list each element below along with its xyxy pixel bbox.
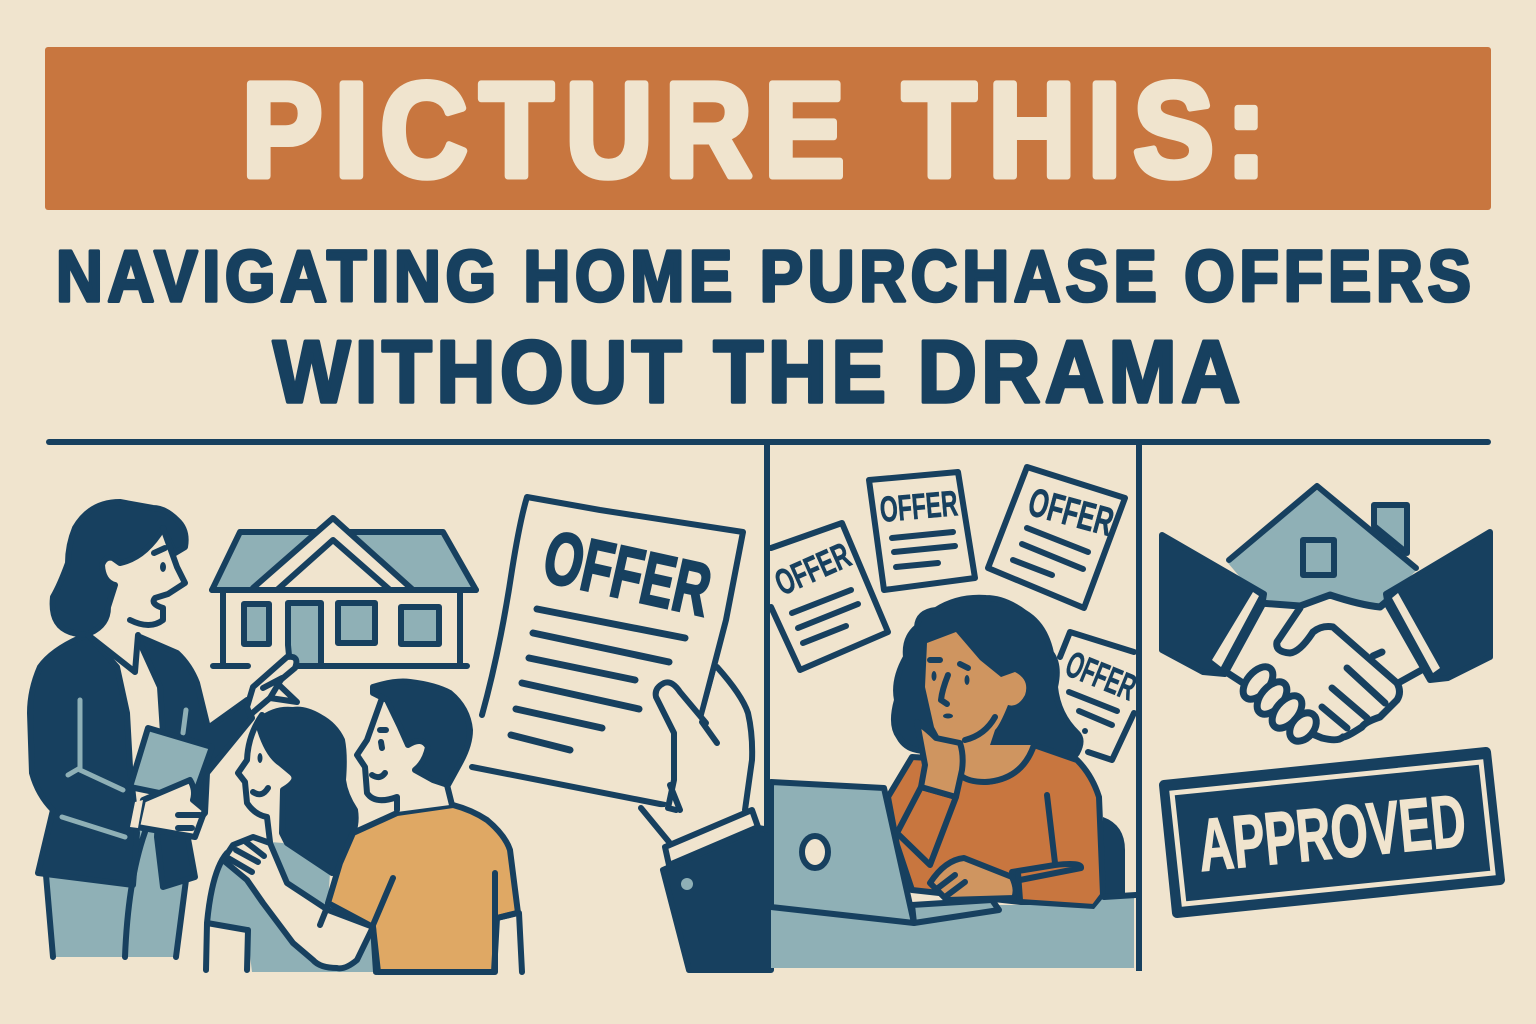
panel: overwhelmed buyer bbox=[769, 467, 1142, 968]
icon: offer document in hand bbox=[472, 497, 771, 970]
subtitle heading: NAVIGATING HOME PURCHASE OFFERS bbox=[56, 236, 1471, 317]
figure: couple bbox=[206, 682, 522, 972]
subtitle heading bbox=[56, 236, 1471, 422]
figure: woman at laptop bbox=[888, 598, 1125, 907]
sheet 3 bbox=[988, 467, 1125, 608]
icon: house bbox=[212, 518, 476, 666]
sheet 4: OFFER bbox=[1060, 643, 1142, 708]
woman bbox=[206, 710, 373, 972]
desk bbox=[771, 894, 1134, 968]
sheet 2 bbox=[869, 472, 975, 590]
sheet 2: OFFER bbox=[878, 482, 959, 530]
icon: clipboard bbox=[130, 728, 212, 800]
stamp: approved bbox=[1164, 752, 1500, 913]
hand on chin bbox=[917, 722, 963, 797]
title: Picture This: PICTURE THIS: bbox=[242, 56, 1266, 205]
sheet 4 bbox=[1060, 632, 1142, 760]
sheet 3: OFFER bbox=[1024, 480, 1118, 545]
header divider bbox=[46, 439, 1491, 445]
sheet 1: OFFER bbox=[769, 534, 857, 603]
icon: laptop bbox=[771, 782, 999, 923]
icon: floating offer sheets bbox=[769, 467, 1142, 760]
title banner bbox=[45, 47, 1491, 210]
hand on keyboard bbox=[1012, 864, 1081, 880]
man bbox=[223, 682, 522, 972]
chair bbox=[1100, 817, 1125, 897]
panel: agent and couple with offer bbox=[30, 497, 771, 972]
arm over woman's shoulder bbox=[223, 837, 373, 968]
icon: offer document in hand: OFFER bbox=[537, 515, 719, 632]
sheet 1 bbox=[769, 523, 888, 670]
panel: approved deal bbox=[1162, 486, 1500, 913]
figure: real estate agent bbox=[30, 502, 297, 957]
panel dividers bbox=[764, 444, 1142, 971]
forearm sleeve bbox=[897, 787, 956, 865]
icon: handshake bbox=[1162, 532, 1490, 746]
subtitle heading: WITHOUT THE DRAMA bbox=[273, 323, 1240, 422]
icon: house roof bbox=[1228, 486, 1417, 605]
